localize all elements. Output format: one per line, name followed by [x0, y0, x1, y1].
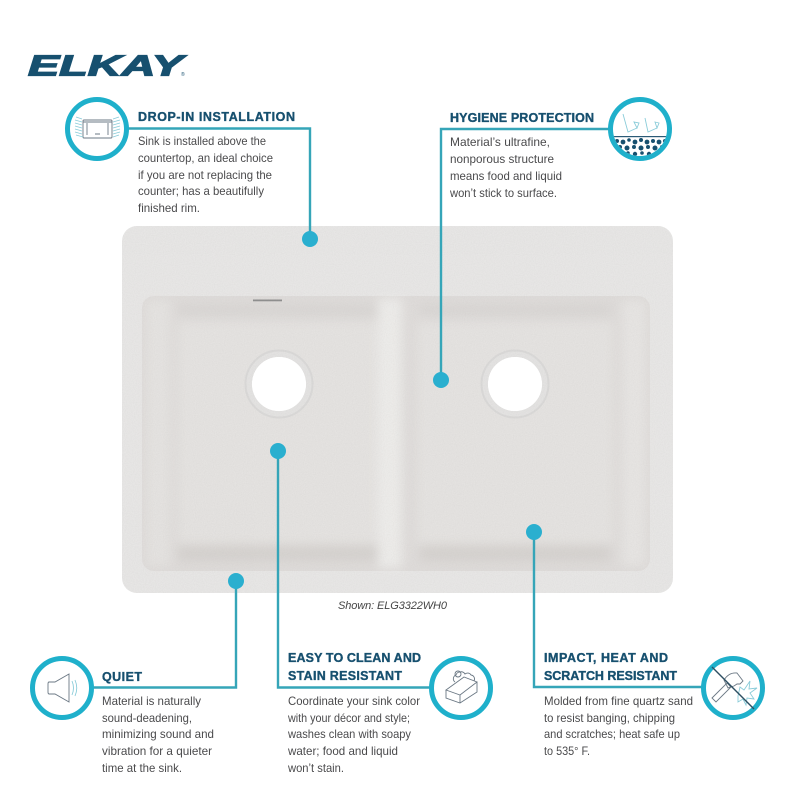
callout: quiet [32, 573, 244, 775]
leader line [278, 451, 433, 688]
body text: Material is naturally [102, 694, 201, 708]
icon: hammer crossed out [704, 658, 762, 718]
sink photo [122, 226, 673, 593]
Elkay logo [28, 50, 187, 82]
heading [544, 651, 677, 683]
heading: IMPACT, HEAT AND [544, 651, 668, 665]
icon: speaker [32, 658, 92, 718]
heading: EASY TO CLEAN AND [288, 651, 421, 665]
body text: time at the sink. [102, 761, 182, 775]
leader line [90, 581, 236, 688]
basin shading [146, 298, 646, 568]
marker [526, 524, 542, 540]
label plate [253, 300, 282, 301]
body text: with your décor and style; [287, 711, 410, 725]
leader line [441, 129, 612, 380]
body text: minimizing sound and [102, 727, 214, 741]
Elkay logo: ELKAY [28, 50, 187, 82]
Elkay logo: ® [181, 71, 185, 78]
leader line [534, 532, 705, 687]
body text: countertop, an ideal choice [138, 151, 273, 165]
body text: won’t stick to surface. [449, 186, 557, 200]
body text: and scratches; heat safe up [544, 727, 680, 741]
body text [287, 694, 420, 775]
body text: Material’s ultrafine, [450, 135, 550, 149]
left drain [246, 350, 312, 418]
body text: Sink is installed above the [138, 134, 266, 148]
callout: impact heat scratch [526, 524, 762, 758]
callout: drop-in installation [68, 100, 318, 247]
marker [433, 372, 449, 388]
body text: to 535° F. [544, 744, 590, 758]
body text: sound-deadening, [102, 711, 192, 725]
marker [302, 231, 318, 247]
right drain opening [488, 357, 542, 411]
body text: water; food and liquid [287, 744, 398, 758]
body text [138, 134, 273, 215]
icon: soap bar [432, 658, 490, 718]
heading: SCRATCH RESISTANT [544, 669, 677, 683]
body text [544, 694, 693, 758]
heading: HYGIENE PROTECTION [450, 111, 594, 125]
body text [449, 135, 562, 200]
body text: counter; has a beautifully [138, 184, 264, 198]
marker [270, 443, 286, 459]
heading: STAIN RESISTANT [288, 669, 402, 683]
left drain opening [252, 357, 306, 411]
body text: nonporous structure [450, 152, 554, 166]
sink deck [122, 226, 673, 593]
body text: won’t stain. [287, 761, 344, 775]
body text: washes clean with soapy [287, 727, 411, 741]
sink basin [142, 296, 650, 571]
icon: nonporous surface [610, 100, 670, 158]
caption: Shown: ELG3322WH0 [338, 600, 448, 612]
heading: DROP-IN INSTALLATION [138, 110, 295, 124]
body text: if you are not replacing the [138, 168, 272, 182]
body text: vibration for a quieter [102, 744, 212, 758]
marker [228, 573, 244, 589]
heading [288, 651, 421, 683]
callout: easy to clean [270, 443, 490, 775]
body text: means food and liquid [450, 169, 562, 183]
icon: sink installed [68, 100, 126, 158]
body text: Coordinate your sink color [288, 694, 420, 708]
body text: to resist banging, chipping [544, 711, 675, 725]
body text: Molded from fine quartz sand [544, 694, 693, 708]
right drain [482, 350, 548, 418]
body text [102, 694, 214, 775]
callout: hygiene protection [433, 100, 670, 388]
body text: finished rim. [138, 201, 200, 215]
heading: QUIET [102, 670, 142, 684]
leader line [125, 128, 310, 239]
speckle texture [122, 226, 673, 593]
